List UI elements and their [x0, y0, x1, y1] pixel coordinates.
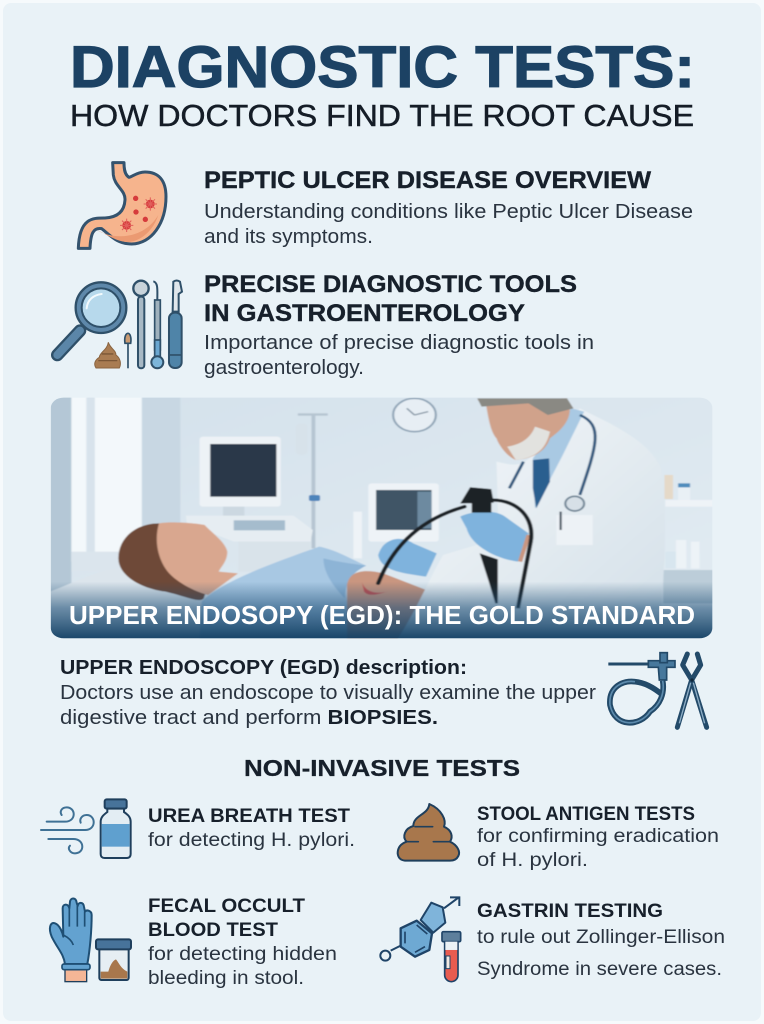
icon: magnifier and diagnostic instruments: [57, 280, 182, 368]
title: [70, 35, 695, 133]
clock: [393, 398, 436, 432]
text: stool antigen tests: of H. pylori.: [477, 850, 588, 871]
text: urea breath test: [148, 805, 355, 851]
equipment cart: [186, 516, 314, 541]
text: diagnostic tools description: gastroenterology.: [204, 357, 364, 379]
heading: non-invasive tests: NON-INVASIVE TESTS: [244, 755, 520, 781]
title: HOW DOCTORS FIND THE ROOT CAUSE: [70, 98, 694, 133]
second monitor: [353, 483, 439, 558]
gloves: [378, 512, 529, 577]
text: gastrin testing: to rule out Zollinger-Ellison: [477, 927, 725, 948]
text: gastrin testing: GASTRIN TESTING: [477, 900, 663, 922]
text: fecal occult blood test: FECAL OCCULT: [148, 895, 305, 917]
text: urea breath test: UREA BREATH TEST: [148, 805, 350, 827]
text: gastrin testing: [477, 900, 725, 980]
icon: breath and bottle: [41, 799, 131, 858]
heading: precise diagnostic tools: PRECISE DIAGNOSTIC TOOLS: [204, 271, 577, 298]
shelf: [663, 475, 714, 603]
text: upper endoscopy description: Doctors use an endoscope to visually examine the upper: [60, 682, 596, 704]
IV pole: [296, 413, 328, 548]
title: DIAGNOSTIC TESTS:: [70, 35, 695, 100]
icon: stomach with ulcers: [78, 163, 166, 248]
image banner title: UPPER ENDOSOPY (EGD): THE GOLD STANDARD: [69, 602, 695, 630]
patient: [118, 522, 430, 642]
icon: glove and specimen cup: [50, 899, 131, 982]
heading: precise diagnostic tools: [204, 271, 577, 327]
bedside monitor: [200, 437, 281, 517]
text: peptic ulcer description: and its symptoms.: [204, 226, 373, 248]
text: fecal occult blood test: for detecting hidden: [148, 944, 337, 965]
text: stool antigen tests: [477, 803, 719, 871]
text: upper endoscopy description: [60, 682, 596, 729]
heading: upper endoscopy description: UPPER ENDOSCOPY (EGD) description:: [60, 656, 467, 679]
icon: stool: [398, 804, 459, 861]
text: peptic ulcer description: Understanding conditions like Peptic Ulcer Disease: [204, 201, 693, 223]
text: fecal occult blood test: [148, 895, 337, 989]
text: gastrin testing: Syndrome in severe cases.: [477, 959, 722, 980]
icon: molecule and blood tube: [380, 897, 461, 982]
doctor: [396, 398, 665, 642]
text: fecal occult blood test: bleeding in stool.: [148, 968, 304, 989]
text: fecal occult blood test: BLOOD TEST: [148, 919, 278, 941]
panel: endoscopy photo illustration: [50, 395, 717, 642]
text: urea breath test: for detecting H. pylori.: [148, 830, 355, 851]
text: stool antigen tests: for confirming eradication: [477, 826, 719, 847]
text: diagnostic tools description: Importance of precise diagnostic tools in: [204, 332, 594, 354]
heading: peptic ulcer disease overview: PEPTIC ULCER DISEASE OVERVIEW: [204, 167, 652, 194]
heading: precise diagnostic tools: IN GASTROENTEROLOGY: [204, 300, 525, 327]
icon: endoscope and biopsy forceps: [608, 653, 707, 727]
pillow: [50, 583, 72, 596]
text: stool antigen tests: STOOL ANTIGEN TESTS: [477, 803, 695, 825]
text: upper endoscopy description: digestive tract and perform BIOPSIES.: [60, 707, 438, 729]
text: diagnostic tools description: [204, 332, 594, 379]
endoscope: [378, 488, 531, 608]
text: peptic ulcer description: [204, 201, 693, 248]
